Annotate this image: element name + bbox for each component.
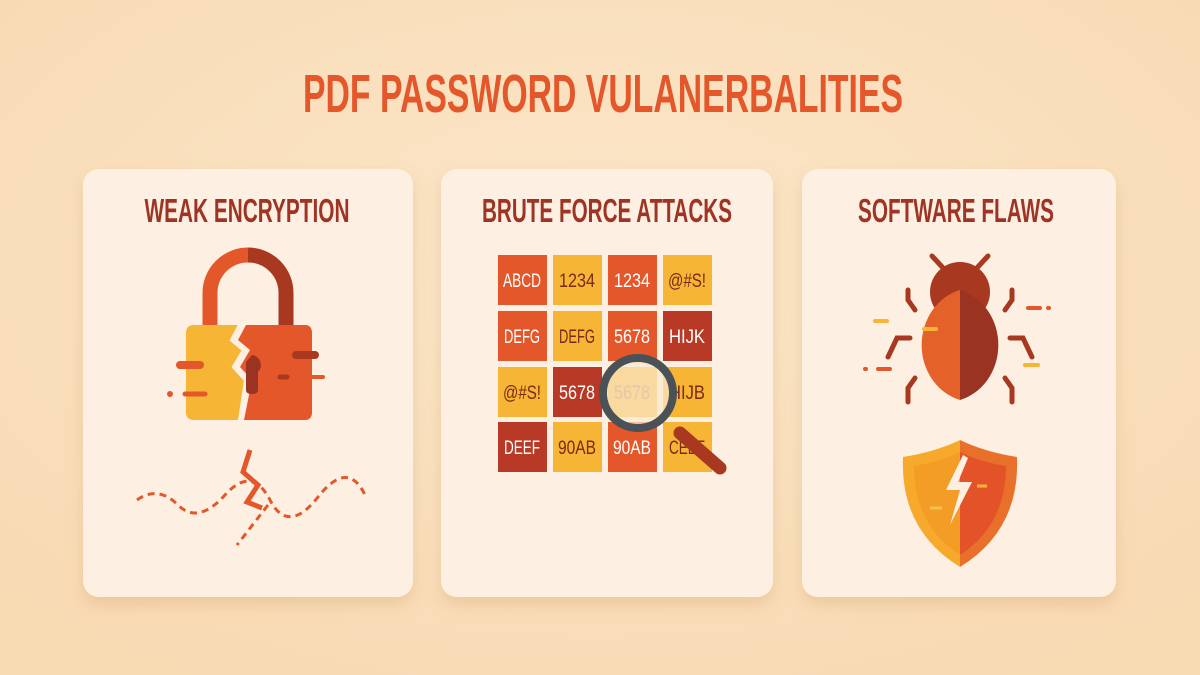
password grid: DEEF bbox=[504, 438, 540, 459]
password grid: @#S! bbox=[668, 271, 706, 292]
heading: weak encryption: WEAK ENCRYPTION bbox=[144, 192, 350, 229]
icon: broken padlock bbox=[167, 255, 323, 420]
password grid: CEEF bbox=[669, 438, 705, 459]
password grid: DEFG bbox=[504, 327, 540, 348]
icon: magnifying glass bbox=[603, 358, 720, 468]
heading: software flaws: SOFTWARE FLAWS bbox=[858, 192, 1054, 229]
panel: brute force attacks bbox=[441, 169, 773, 597]
password grid: ABCD bbox=[503, 271, 541, 292]
password grid: 5678 bbox=[559, 383, 595, 404]
panel: software flaws bbox=[802, 169, 1116, 597]
password grid: 5678 bbox=[614, 383, 650, 404]
icon: shield with lightning bbox=[903, 440, 1017, 567]
password grid: 90AB bbox=[558, 438, 596, 459]
password grid: 1234 bbox=[614, 271, 650, 292]
password grid: @#S! bbox=[503, 383, 541, 404]
password grid bbox=[498, 255, 712, 472]
panel: weak encryption bbox=[83, 169, 413, 597]
password grid: HIJK bbox=[669, 327, 705, 348]
icon: bug bbox=[865, 256, 1049, 402]
heading: brute force attacks: BRUTE FORCE ATTACKS bbox=[482, 192, 732, 229]
password grid: 5678 bbox=[614, 327, 650, 348]
icon: crack and wavy line bbox=[137, 450, 365, 545]
password grid: 1234 bbox=[559, 271, 595, 292]
password grid: HIJB bbox=[669, 383, 705, 404]
password grid: DEFG bbox=[559, 327, 595, 348]
password grid: 90AB bbox=[613, 438, 651, 459]
